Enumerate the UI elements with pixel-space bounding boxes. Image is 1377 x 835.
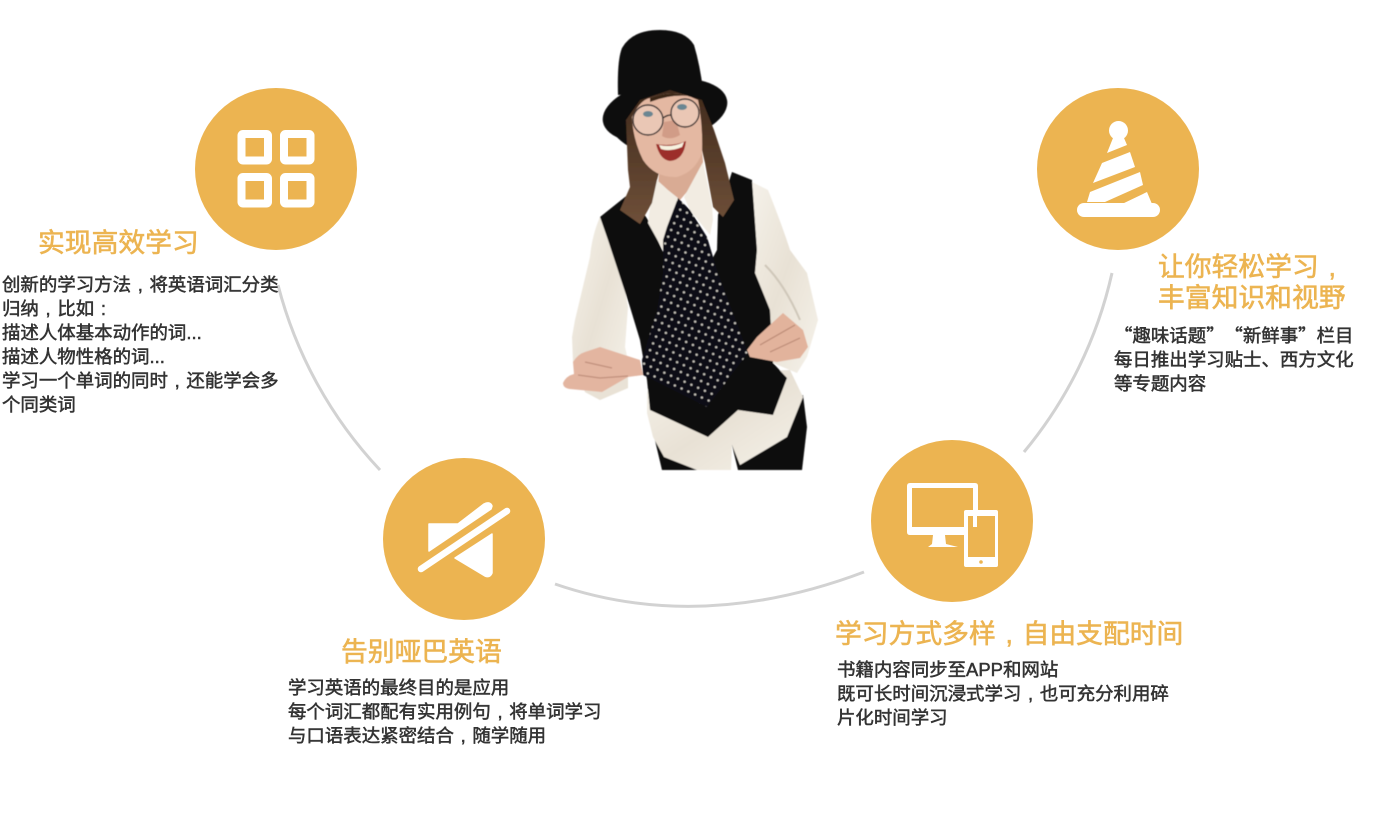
top hat crown xyxy=(618,30,703,95)
text block: 实现高效学习: , xyxy=(138,274,143,295)
hair fringe shadow xyxy=(650,93,698,102)
polka dot cravat xyxy=(642,198,748,407)
eyes xyxy=(643,111,653,117)
face xyxy=(632,93,702,177)
text block: 学习方式多样: 书籍内容同步至APP和网站 xyxy=(837,659,1058,680)
text block: 告别哑巴英语: , xyxy=(461,725,466,746)
text block: 学习方式多样: 既可长时间沉浸式学习 也可充分利用碎 xyxy=(837,683,1169,704)
heading: 让你轻松学习: 让你轻松学习 xyxy=(1158,252,1319,282)
text block: 实现高效学习: : xyxy=(101,298,106,319)
text block: 告别哑巴英语: 与口语表达紧密结合 随学随用 xyxy=(288,725,546,746)
vest xyxy=(600,172,787,437)
text block: 实现高效学习: 个同类词 xyxy=(2,394,76,415)
collar xyxy=(648,180,678,250)
text block: 实现高效学习: , xyxy=(175,370,180,391)
monitor xyxy=(907,483,978,535)
right hand xyxy=(747,313,808,362)
text block: 告别哑巴英语: 学习英语的最终目的是应用 xyxy=(288,677,509,698)
text block: 趣味话题: “趣味话题” “新鲜事”栏目 xyxy=(1114,322,1353,348)
text block: 告别哑巴英语: 每个词汇都配有实用例句 将单词学习 xyxy=(288,701,601,722)
heading: 学习方式多样: 学习方式多样 自由支配时间 xyxy=(835,619,1183,649)
phone xyxy=(964,510,998,567)
nose shade xyxy=(662,120,680,138)
text block: 实现高效学习: 描述人物性格的词... xyxy=(2,346,165,367)
text block: 趣味话题 xyxy=(1114,322,1354,394)
arc: left connector xyxy=(278,285,380,470)
heading: 实现高效学习: 实现高效学习 xyxy=(38,228,199,258)
heading: 让你轻松学习: , xyxy=(1328,252,1336,282)
left sleeve xyxy=(572,217,628,400)
mouth xyxy=(656,141,686,161)
arc: right connector xyxy=(1024,273,1112,452)
trousers xyxy=(653,395,807,470)
text block: 实现高效学习: 学习一个单词的同时 还能学会多 xyxy=(2,370,279,391)
heading: 学习方式多样: , xyxy=(1005,619,1013,649)
text block: 告别哑巴英语: , xyxy=(497,701,503,722)
hair xyxy=(620,90,734,224)
icon circle: grid xyxy=(195,88,357,250)
text block: 趣味话题: 等专题内容 xyxy=(1114,373,1206,394)
text block: 学习方式多样 xyxy=(837,659,1169,728)
top hat brim xyxy=(598,70,732,152)
text block: 告别哑巴英语 xyxy=(288,677,601,746)
text block: 学习方式多样: , xyxy=(1028,683,1033,704)
heading: 让你轻松学习: 丰富知识和视野 xyxy=(1158,283,1346,313)
text block: 实现高效学习: 归纳 比如 xyxy=(2,298,94,319)
text block: 实现高效学习 xyxy=(2,274,279,415)
icon circle: party hat xyxy=(1037,88,1199,250)
photo: magician in top hat xyxy=(563,30,818,470)
left hand xyxy=(563,347,643,392)
heading: 让你轻松学习 xyxy=(1158,252,1346,313)
icon circle: monitor and phone xyxy=(871,440,1033,602)
text block: 实现高效学习: 描述人体基本动作的词... xyxy=(2,322,202,343)
text block: 实现高效学习: , xyxy=(46,298,51,319)
arc: bottom connector xyxy=(555,572,864,606)
text block: 趣味话题: 每日推出学习贴士、西方文化 xyxy=(1114,349,1354,370)
glasses xyxy=(633,99,699,135)
shirt lower xyxy=(647,370,803,470)
right sleeve xyxy=(750,182,818,373)
text block: 学习方式多样: 片化时间学习 xyxy=(837,707,948,728)
text block: 实现高效学习: 创新的学习方法 将英语词汇分类 xyxy=(2,274,279,295)
neck xyxy=(658,150,704,200)
heading: 告别哑巴英语: 告别哑巴英语 xyxy=(341,637,502,667)
icon circle: muted speaker xyxy=(383,458,545,620)
